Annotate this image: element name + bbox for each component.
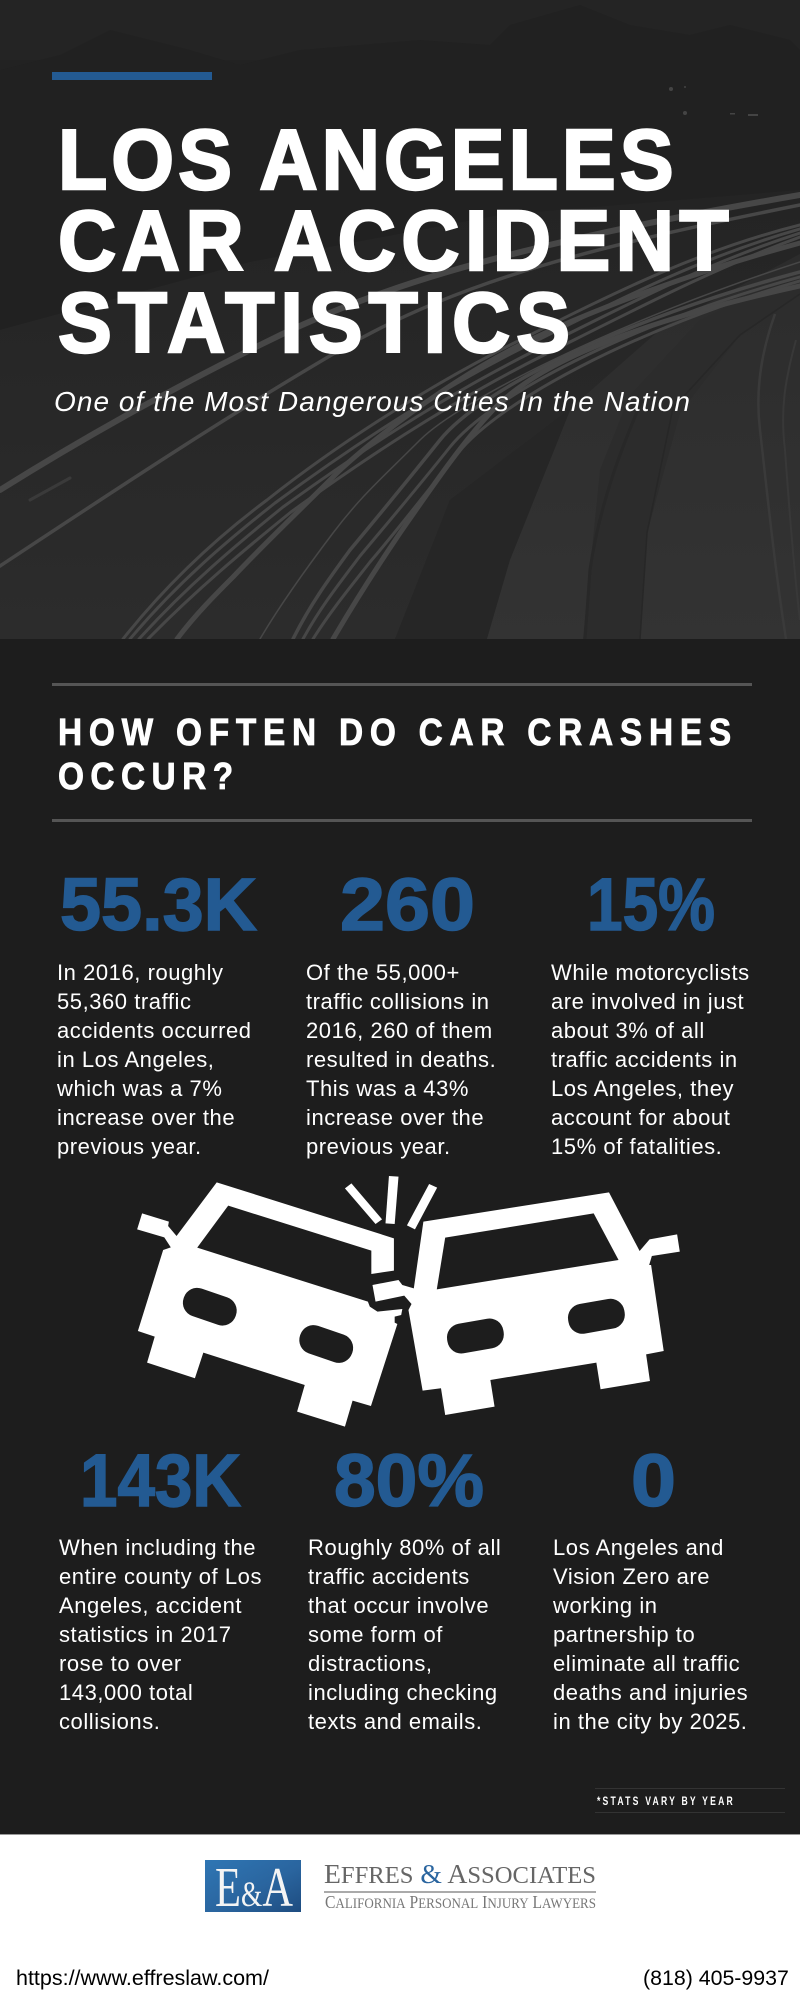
accent bar [52,72,212,80]
stat numbers: second row: 80% [334,1439,484,1522]
text: motorcyclist fatalities: traffic accidents in [551,1047,738,1072]
stat numbers: first row: 15% [587,863,715,946]
text: 2016 accident count: In 2016, roughly [57,960,224,985]
impact sparks [345,1183,382,1224]
text: motorcyclist fatalities: account for about [551,1105,730,1130]
text: motorcyclist fatalities: While motorcyclists [551,960,750,985]
text: 2016 accident count: 55,360 traffic [57,989,192,1014]
text: county-wide collisions: rose to over [59,1651,182,1676]
footnote: stats vary by year [595,1788,785,1813]
text: Vision Zero [553,1535,748,1734]
footnote: stats vary by year: *STATS VARY BY YEAR [597,1796,733,1808]
text: Vision Zero: working in [553,1593,658,1618]
text: distracted driving: distractions, [308,1651,433,1676]
text: county-wide collisions: statistics in 2017 [59,1622,232,1647]
text: county-wide collisions [59,1535,262,1734]
panel: how often do car crashes occur [0,639,800,1834]
text: 2016 fatal collisions: This was a 43% [306,1076,469,1101]
panel: hero with night highway background [0,0,800,639]
title: STATISTICS [58,275,570,370]
text: Vision Zero: eliminate all traffic [553,1651,740,1676]
text: 2016 accident count: in Los Angeles, [57,1047,214,1072]
heading: how often do car crashes occur: OCCUR? [58,755,233,797]
text: website URL: https://www.effreslaw.com/ [16,1966,269,1990]
title: LOS ANGELES [58,112,674,207]
text: motorcyclist fatalities: are involved in just [551,989,744,1014]
text: 2016 fatal collisions: traffic collisions in [306,989,490,1014]
divider: bottom of section heading [52,819,752,822]
text: motorcyclist fatalities [551,960,750,1159]
text: distracted driving: traffic accidents [308,1564,470,1589]
text: Vision Zero: Vision Zero are [553,1564,710,1589]
text: motorcyclist fatalities: about 3% of all [551,1018,705,1043]
text: 2016 accident count: previous year. [57,1134,202,1159]
text: motorcyclist fatalities: 15% of fatalities. [551,1134,722,1159]
stat numbers: second row: 143K [80,1439,241,1522]
text: 2016 fatal collisions [306,960,496,1159]
text: county-wide collisions: collisions. [59,1709,160,1734]
title [58,112,729,370]
stat numbers: first row: 55.3K [60,863,257,946]
text: 2016 accident count: which was a 7% [57,1076,222,1101]
text: 2016 fatal collisions: resulted in deaths. [306,1047,496,1072]
text: distracted driving [308,1535,501,1734]
text: county-wide collisions: 143,000 total [59,1680,193,1705]
text: distracted driving: some form of [308,1622,443,1647]
logo: Effres & Associates: EFFRES & ASSOCIATES [324,1859,596,1889]
text: county-wide collisions: entire county of Los [59,1564,262,1589]
text: Vision Zero: Los Angeles and [553,1535,724,1560]
divider: top of section heading [52,683,752,686]
stat numbers: first row: 260 [340,863,475,946]
text: 2016 fatal collisions: increase over the [306,1105,484,1130]
panel: footer [0,1834,800,2000]
text: distracted driving: that occur involve [308,1593,489,1618]
text: distracted driving: Roughly 80% of all [308,1535,501,1560]
logo: Effres & Associates: E&A [215,1857,293,1919]
right car body [372,1192,680,1415]
text: 2016 fatal collisions: 2016, 260 of them [306,1018,493,1043]
text: Vision Zero: partnership to [553,1622,695,1647]
text: 2016 accident count [57,960,252,1159]
text: 2016 accident count: increase over the [57,1105,235,1130]
text: 2016 fatal collisions: previous year. [306,1134,451,1159]
text: Vision Zero: deaths and injuries [553,1680,748,1705]
heading: how often do car crashes occur: HOW OFTEN DO CAR CRASHES [58,711,731,753]
text: motorcyclist fatalities: Los Angeles, they [551,1076,734,1101]
stat numbers: second row: 0 [631,1439,676,1522]
subtitle: One of the Most Dangerous Cities In the Nation [54,386,690,417]
text: county-wide collisions: Angeles, accident [59,1593,242,1618]
text: phone number: (818) 405-9937 [643,1966,789,1990]
left car body [137,1182,402,1427]
text: county-wide collisions: When including the [59,1535,256,1560]
text: 2016 accident count: accidents occurred [57,1018,252,1043]
logo: Effres & Associates: CALIFORNIA PERSONAL INJURY LAWYERS [325,1892,596,1912]
background: highway light trails [0,86,800,639]
text: Vision Zero: in the city by 2025. [553,1709,747,1734]
text: distracted driving: including checking [308,1680,498,1705]
title: CAR ACCIDENT [58,193,729,288]
text: distracted driving: texts and emails. [308,1709,482,1734]
text: 2016 fatal collisions: Of the 55,000+ [306,960,460,985]
